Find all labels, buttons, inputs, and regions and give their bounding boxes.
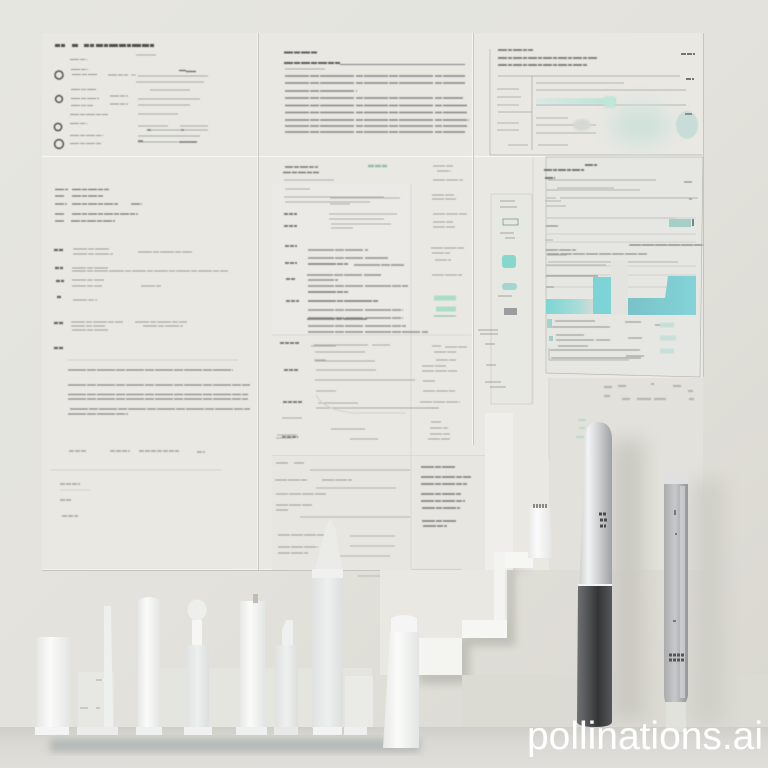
- panel: teal bar chart card: [544, 165, 703, 360]
- mint bar end: [604, 96, 615, 108]
- paragraph text lines: [285, 76, 469, 132]
- mint haze: [610, 105, 670, 145]
- tiny dots: [673, 510, 676, 621]
- corner label: [681, 54, 695, 79]
- thin rules: [50, 360, 238, 490]
- barrel: [664, 484, 688, 702]
- panel: top left card edges: [42, 33, 703, 570]
- bar: left teal low: [546, 299, 593, 314]
- teal value tag: [669, 219, 691, 227]
- heading text lines: [498, 50, 598, 65]
- panel: sheet backing: [42, 33, 703, 570]
- panel: top center paragraph: [284, 52, 469, 132]
- tag end tick: [692, 219, 694, 226]
- yellow label: [503, 244, 519, 246]
- icon group: white tubes: [35, 518, 419, 748]
- top table lines: [545, 180, 700, 265]
- panel: right data card: [546, 157, 703, 377]
- heading bars: [55, 44, 154, 47]
- tube 5: [236, 594, 267, 735]
- pen mark: [599, 514, 608, 526]
- dark barrel: [577, 586, 612, 727]
- document sheets: [42, 33, 704, 570]
- icon: ring list markers: [54, 71, 63, 148]
- tube 1: [35, 637, 70, 735]
- lower card lines: [276, 345, 428, 439]
- stair wall body: [380, 552, 533, 675]
- list left text lines: [70, 60, 128, 144]
- panel: floating labels: [576, 384, 694, 437]
- panel: raised center card: [272, 184, 412, 334]
- long rules: [300, 470, 410, 556]
- dark paragraph: [68, 370, 250, 414]
- card heading: [544, 165, 597, 178]
- panel: large left sheet text: [50, 190, 250, 516]
- table lines: [497, 76, 686, 150]
- green faint marks: [576, 420, 586, 437]
- dark tick: [685, 113, 692, 115]
- tube 4 with round head: [184, 600, 212, 735]
- base glow: [666, 702, 686, 732]
- bar: right teal step: [628, 276, 696, 315]
- barrel highlight: [680, 486, 685, 698]
- panel: lower center card: [272, 456, 485, 570]
- small label lines: [604, 384, 694, 399]
- top right marks: [546, 182, 703, 254]
- strip label: [499, 170, 513, 172]
- panel: lower center text: [275, 463, 471, 576]
- cup label: [533, 504, 547, 508]
- stair shape: [380, 413, 552, 684]
- floor and shadows: [0, 440, 768, 768]
- icon: dark and silver pen: [577, 422, 612, 727]
- chart label lines: [546, 276, 598, 287]
- bar: pale gap column: [611, 260, 628, 315]
- panel: narrow legend strip: [491, 194, 532, 404]
- dark emphasised lines: [307, 264, 378, 319]
- heading rule: [340, 64, 465, 66]
- silver barrel: [578, 422, 612, 620]
- legend lines: [550, 321, 673, 358]
- top cup: [528, 507, 552, 558]
- tube 3: [136, 597, 162, 735]
- stair lower sheet: [419, 638, 462, 675]
- sub line: [285, 68, 325, 70]
- mint underline: [434, 315, 456, 317]
- tube 9 front: [383, 615, 419, 748]
- cap: [664, 472, 688, 486]
- middle rows markers: [54, 250, 64, 348]
- translucent column: [485, 413, 513, 570]
- back wall shade: [462, 675, 768, 727]
- stair middle step: [462, 620, 507, 638]
- block 8: [344, 676, 373, 735]
- upper lines: [284, 180, 400, 228]
- dark marks: [669, 655, 684, 660]
- dark pen shade: [612, 440, 644, 720]
- collar: [578, 584, 612, 586]
- mint legend cells: [660, 325, 676, 351]
- mint gradient bar: [536, 98, 616, 104]
- pale teal pill: [502, 283, 517, 290]
- teal outline swatch: [503, 219, 518, 225]
- grey smudge: [573, 119, 591, 131]
- floor contact shadow: [50, 739, 420, 752]
- right column dark lines: [421, 467, 471, 526]
- lower right cell labels: [358, 570, 462, 576]
- card outline: [490, 49, 702, 155]
- tube 7 tall: [312, 518, 343, 735]
- tube 6 pump: [274, 620, 298, 735]
- list dark marks: [138, 70, 197, 142]
- side labels: [280, 214, 303, 437]
- panel: lower right wall cutout: [549, 378, 703, 570]
- grey swatch: [504, 308, 517, 315]
- panel: vertical swatch strip: [478, 171, 519, 387]
- left column lines: [275, 463, 352, 553]
- section text rows: [55, 190, 142, 221]
- list right text lines: [131, 55, 208, 142]
- footer rows: [60, 451, 205, 516]
- tube 2 translucent: [77, 606, 118, 735]
- green tag: [368, 165, 387, 167]
- mint block: [434, 298, 456, 309]
- panel: seam of lower insets: [272, 157, 549, 570]
- right pen shade: [692, 480, 724, 725]
- teal swatch: [502, 255, 516, 268]
- bottom table box: [549, 348, 629, 360]
- stair top step: [494, 552, 533, 568]
- icon: grey pen: [664, 472, 688, 732]
- paragraph heading: [284, 52, 340, 63]
- floor band: [0, 727, 768, 768]
- panel: top right chart sheet: [490, 49, 702, 155]
- curved divider: [316, 395, 406, 413]
- watermark: pollinations.ai: pollinations.ai: [527, 715, 763, 758]
- stair shadow on lower wall: [419, 566, 533, 684]
- heading pair: [283, 167, 319, 172]
- panel: center text rows: [276, 166, 467, 439]
- panel: card seams: [42, 33, 704, 570]
- panel: top left list: [54, 46, 208, 148]
- grid lines: [546, 218, 696, 287]
- right column lines: [420, 166, 467, 439]
- middle text rows: [71, 249, 228, 330]
- faint back panels: [160, 668, 372, 727]
- stair riser: [494, 552, 505, 620]
- bar: left teal tall: [593, 277, 611, 314]
- dark body lines: [307, 250, 428, 332]
- circle chart: [676, 111, 698, 139]
- strip text lines: [478, 201, 517, 387]
- legend swatch small: [549, 336, 553, 341]
- legend swatch: [547, 319, 552, 328]
